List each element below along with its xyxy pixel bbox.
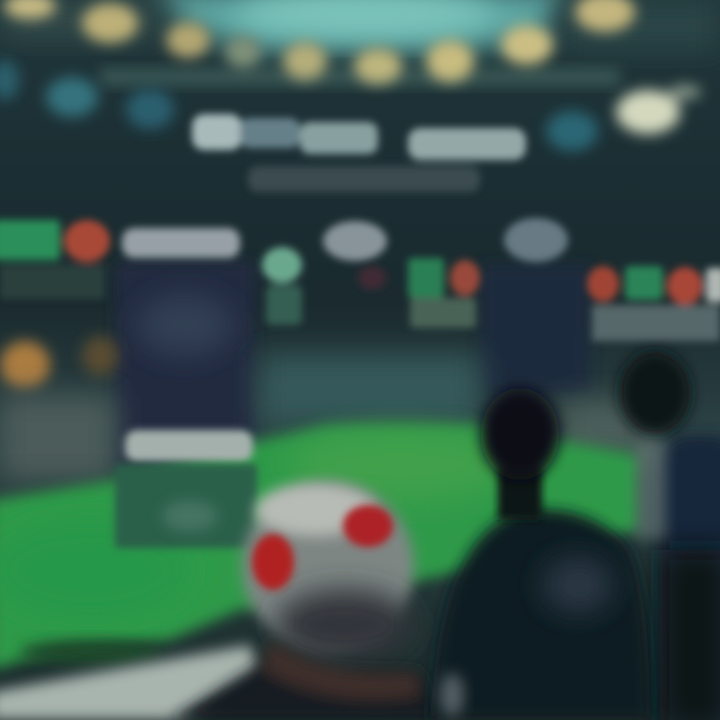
dark foreground near the pitch [20,640,160,664]
right banner: green, red, white [587,266,720,341]
white scoreboard labels [122,218,568,262]
dark blue panel: right [480,265,590,395]
hands and arm [170,640,440,720]
blurred scoreboard headline [192,114,526,192]
pale ledge [0,645,262,720]
centre flags [262,247,480,328]
white label above green panel [125,430,253,462]
main fan silhouette [430,388,650,720]
green pitch [0,425,640,670]
orange side lights [0,336,118,389]
dark blue panel: left [115,262,255,472]
crowd stand [0,355,650,480]
roof floodlights [4,0,701,134]
left banner: green and red [0,220,110,299]
blue roof panels [0,60,598,151]
green panel [115,464,257,548]
ball with red patches [242,482,415,661]
stadium roof [0,0,720,86]
second fan silhouette [619,351,720,720]
